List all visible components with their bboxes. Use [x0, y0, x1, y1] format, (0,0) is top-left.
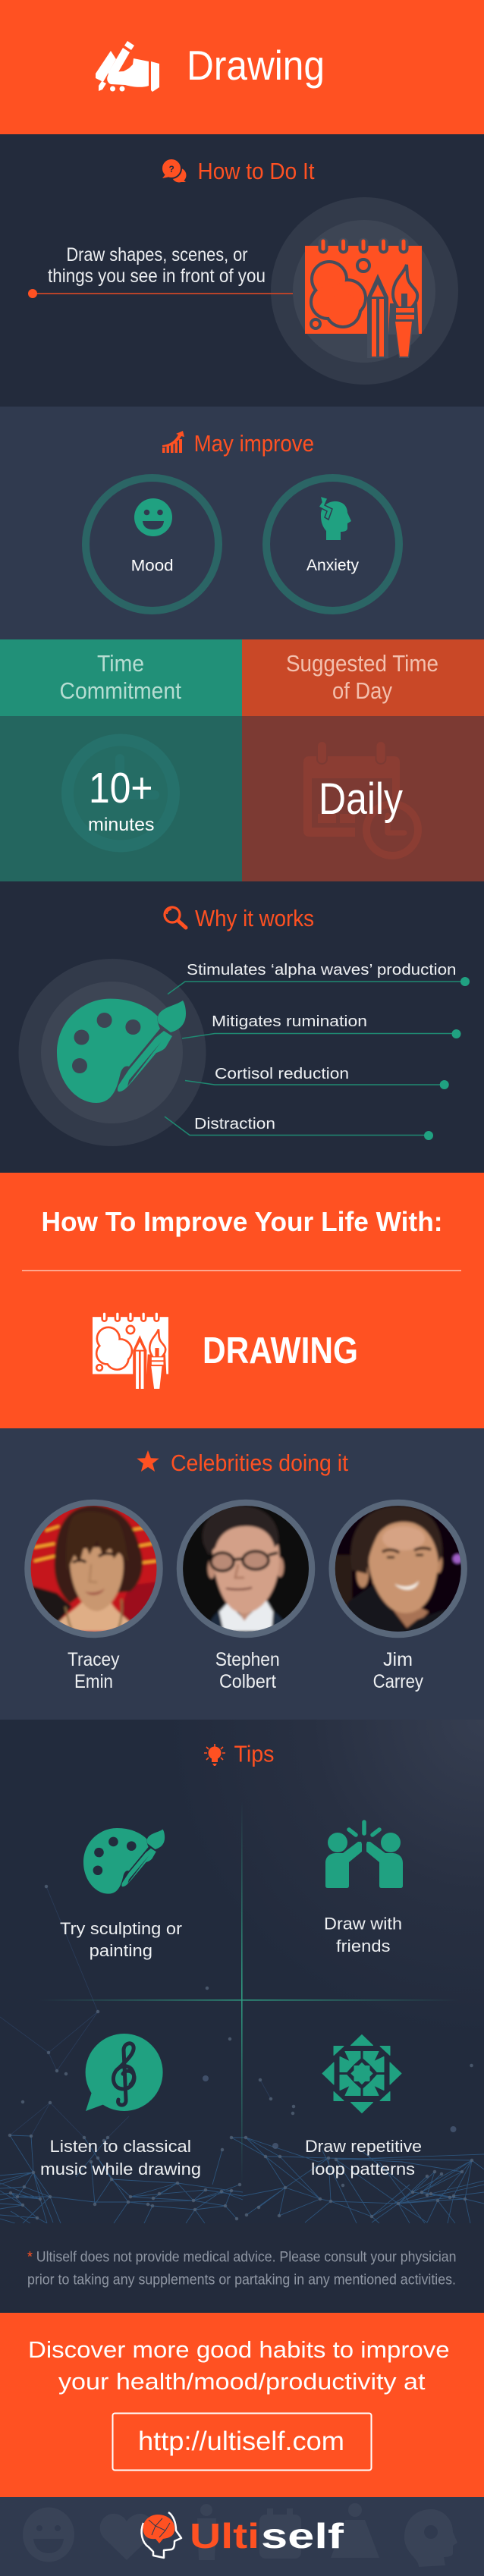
name: Stephen Colbert: Colbert	[219, 1671, 276, 1692]
tip: listen to classical music: music while drawing	[40, 2160, 201, 2179]
benefit: mood: Mood	[131, 557, 174, 575]
text: discover more: Discover more good habits to improve	[28, 2336, 450, 2363]
tip: draw with friends: friends	[336, 1937, 390, 1956]
icon: high five	[325, 1822, 403, 1888]
panel: may improve	[0, 407, 484, 639]
disclaimer text: * Ultiself does not provide medical advice. Please consult your physician	[27, 2250, 457, 2266]
icon: paint palette illustration	[18, 959, 206, 1146]
name: Stephen Colbert	[215, 1649, 280, 1692]
icon: head with lightning	[319, 496, 351, 540]
logo: Ultiself	[142, 2512, 344, 2558]
heading: may improve: May improve	[194, 430, 314, 457]
portrait: Jim Carrey	[332, 1503, 464, 1635]
portrait: Tracey Emin	[27, 1503, 159, 1635]
icon: speech bubble with clef	[86, 2034, 163, 2111]
icon: light bulb	[204, 1744, 225, 1766]
value: daily: Daily	[319, 774, 403, 824]
tip: sculpting or painting: Try sculpting or	[60, 1919, 182, 1938]
text: discover more: your health/mood/productivity at	[58, 2368, 426, 2395]
disclaimer text	[27, 2250, 457, 2289]
benefit: anxiety: Anxiety	[306, 557, 359, 574]
heading: suggested time of day: of Day	[332, 677, 392, 704]
tip: repetitive loop patterns: loop patterns	[311, 2160, 415, 2179]
heading: tips: Tips	[234, 1741, 275, 1767]
benefit: anxiety	[266, 478, 399, 611]
reason: distraction: Distraction	[194, 1115, 275, 1132]
icon: palette	[83, 1828, 165, 1894]
value: 10+ minutes: 10+	[89, 764, 153, 812]
heading: suggested time of day	[286, 650, 438, 704]
icon: brain head	[142, 2512, 181, 2558]
tip: listen to classical music	[40, 2034, 201, 2179]
tip: draw with friends: Draw with	[324, 1915, 402, 1934]
panel: how to do it	[0, 134, 484, 407]
panel: header	[0, 0, 484, 134]
heading: time commitment: Commitment	[59, 677, 181, 704]
panel: suggested time of day	[242, 639, 484, 881]
icon: smiley	[134, 498, 172, 536]
name: Jim Carrey	[373, 1649, 423, 1692]
icon: magnifier	[165, 907, 186, 928]
button: url	[112, 2414, 372, 2470]
reason: cortisol	[185, 1065, 449, 1089]
title: drawing: DRAWING	[203, 1330, 358, 1371]
panel: time commitment	[0, 639, 242, 881]
icon: sketchbook illustration	[271, 197, 458, 385]
tip: repetitive loop patterns	[305, 2034, 422, 2179]
text: discover more	[28, 2336, 450, 2395]
portrait: Stephen Colbert	[180, 1503, 312, 1635]
panel: celebrities	[0, 1428, 484, 1720]
icon: clock	[68, 740, 174, 847]
text: instructions: Draw shapes, scenes, or	[67, 244, 247, 265]
heading: tips	[204, 1741, 275, 1767]
panel: disclaimer	[0, 2223, 484, 2313]
disclaimer text: prior to taking any supplements or partaking in any mentioned activities.	[27, 2273, 456, 2289]
icon: question bubbles	[162, 159, 187, 182]
reason: rumination	[182, 1013, 461, 1038]
panel: why it works	[0, 881, 484, 1173]
icon: star	[137, 1450, 159, 1472]
tip: listen to classical music: Listen to classical	[50, 2137, 191, 2156]
reason: alpha waves: Stimulates ‘alpha waves’ production	[187, 961, 457, 979]
panel: call to action	[0, 2313, 484, 2497]
icon: calendar with clock	[303, 741, 418, 856]
panel: footer	[0, 2497, 484, 2576]
reason: cortisol: Cortisol reduction	[215, 1065, 349, 1082]
reason: alpha waves	[168, 961, 470, 994]
heading: time commitment: Time	[97, 650, 144, 677]
reason: distraction	[165, 1115, 433, 1140]
benefit: mood	[86, 478, 218, 611]
reason: rumination: Mitigates rumination	[212, 1013, 367, 1030]
icon: hand drawing	[96, 41, 159, 92]
tip: sculpting or painting	[60, 1828, 182, 1960]
name: Tracey Emin: Tracey	[68, 1649, 120, 1670]
value: 10+ minutes: minutes	[88, 815, 155, 835]
panel: how to improve banner	[0, 1173, 484, 1428]
heading: why it works: Why it works	[195, 905, 314, 931]
title: Drawing	[187, 42, 325, 89]
heading: time commitment	[59, 650, 181, 704]
text: instructions: things you see in front of you	[48, 265, 266, 287]
heading: how to improve: How To Improve Your Life With:	[41, 1206, 443, 1237]
name: Jim Carrey: Jim	[383, 1649, 413, 1670]
value: 10+ minutes	[88, 764, 155, 835]
logo: Ultiself: Ulti	[190, 2516, 259, 2556]
heading: suggested time of day: Suggested Time	[286, 650, 438, 677]
icon: rising chart	[162, 431, 184, 453]
name: Stephen Colbert: Stephen	[215, 1649, 280, 1670]
tip: repetitive loop patterns: Draw repetitive	[305, 2137, 422, 2156]
heading: how to do it: How to Do It	[197, 158, 315, 184]
name: Jim Carrey: Carrey	[373, 1671, 423, 1692]
text: instructions	[48, 244, 266, 287]
button: url: http://ultiself.com	[138, 2427, 344, 2456]
connector line	[28, 289, 293, 298]
panel: tips	[0, 1720, 484, 2223]
logo: Ultiself: self	[261, 2516, 344, 2556]
tip: draw with friends	[324, 1822, 403, 1956]
icon: geometric star	[322, 2034, 401, 2113]
name: Tracey Emin	[68, 1649, 120, 1692]
heading: celebrities: Celebrities doing it	[171, 1450, 348, 1476]
name: Tracey Emin: Emin	[74, 1671, 113, 1692]
ghost icons	[23, 2503, 457, 2567]
tip: sculpting or painting: painting	[90, 1941, 152, 1960]
icon: question bubbles: ?	[168, 164, 174, 174]
icon: sketchbook white	[93, 1314, 168, 1390]
